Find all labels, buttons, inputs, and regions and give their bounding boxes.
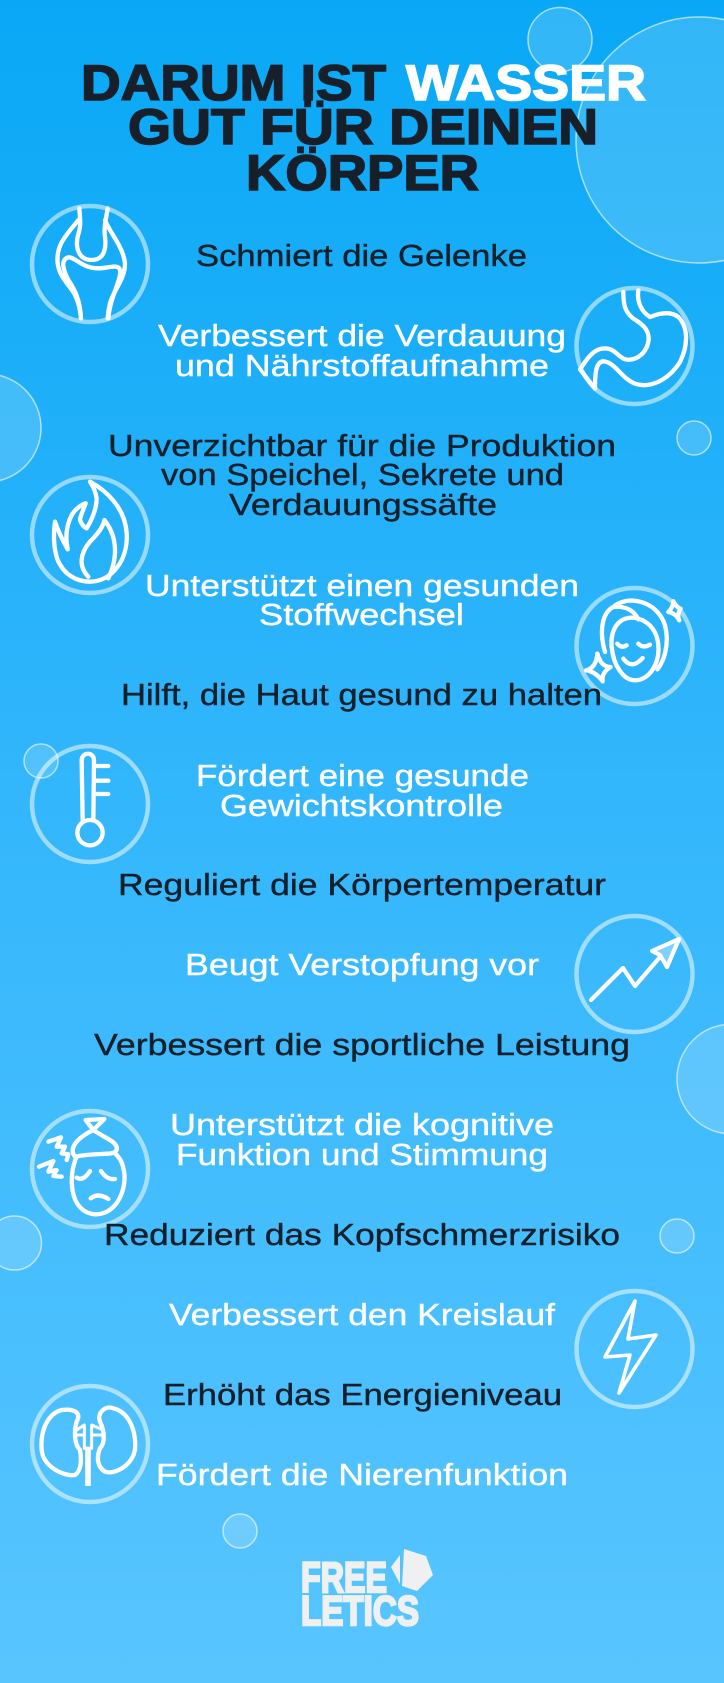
benefit: cognition: Unterstützt die kognitive — [170, 1107, 554, 1142]
icon: joint — [32, 206, 148, 322]
bubble over thermometer — [24, 744, 58, 778]
benefit: energy: Erhöht das Energieniveau — [163, 1377, 562, 1412]
benefit: digestion: und Nährstoffaufnahme — [175, 348, 549, 383]
benefit: weight — [196, 758, 529, 823]
icon: lightning bolt — [576, 1291, 692, 1407]
icon: thermometer — [32, 746, 148, 862]
benefit: joints: Schmiert die Gelenke — [196, 238, 527, 273]
title: WASSER — [406, 55, 646, 111]
benefit: athletic performance: Verbessert die sportliche Leistung — [94, 1027, 630, 1062]
benefit: saliva: von Speichel, Sekrete und — [161, 457, 564, 492]
icon: stomach — [576, 288, 692, 404]
logo: Freeletics — [301, 1549, 433, 1634]
benefit: weight: Fördert eine gesunde — [196, 758, 529, 793]
title — [81, 55, 646, 201]
title: DARUM IST — [81, 55, 386, 111]
logo: Freeletics: LETICS — [301, 1587, 419, 1634]
benefit: saliva: Unverzichtbar für die Produktion — [108, 428, 616, 463]
benefit: kidneys: Fördert die Nierenfunktion — [156, 1457, 568, 1492]
icon: flame — [32, 477, 148, 593]
benefit: saliva: Verdauungssäfte — [229, 487, 497, 522]
benefit: constipation: Beugt Verstopfung vor — [185, 947, 539, 982]
benefit: cognition — [170, 1107, 554, 1172]
icon: face with towel — [576, 588, 692, 704]
benefit: metabolism: Unterstützt einen gesunden — [145, 568, 579, 603]
benefit: digestion — [158, 318, 566, 383]
benefit: skin: Hilft, die Haut gesund zu halten — [121, 677, 602, 712]
logo: Freeletics: FREE — [301, 1554, 387, 1602]
icon: kidneys — [32, 1386, 148, 1502]
benefit: circulation: Verbessert den Kreislauf — [169, 1297, 555, 1332]
icon: rising arrow — [576, 916, 692, 1032]
title: GUT FÜR DEINEN — [128, 99, 598, 155]
list of benefits — [94, 238, 630, 1492]
benefit: headaches: Reduziert das Kopfschmerzrisiko — [104, 1217, 620, 1252]
title: KÖRPER — [246, 145, 479, 201]
benefit: weight: Gewichtskontrolle — [220, 788, 503, 823]
benefit: saliva — [108, 428, 616, 522]
benefit: metabolism: Stoffwechsel — [259, 597, 464, 632]
benefit: cognition: Funktion und Stimmung — [176, 1137, 548, 1172]
benefit: metabolism — [145, 568, 579, 632]
benefit: temperature: Reguliert die Körpertemperatur — [118, 867, 606, 902]
benefit: digestion: Verbessert die Verdauung — [158, 318, 566, 353]
icon: headache face — [32, 1111, 148, 1227]
